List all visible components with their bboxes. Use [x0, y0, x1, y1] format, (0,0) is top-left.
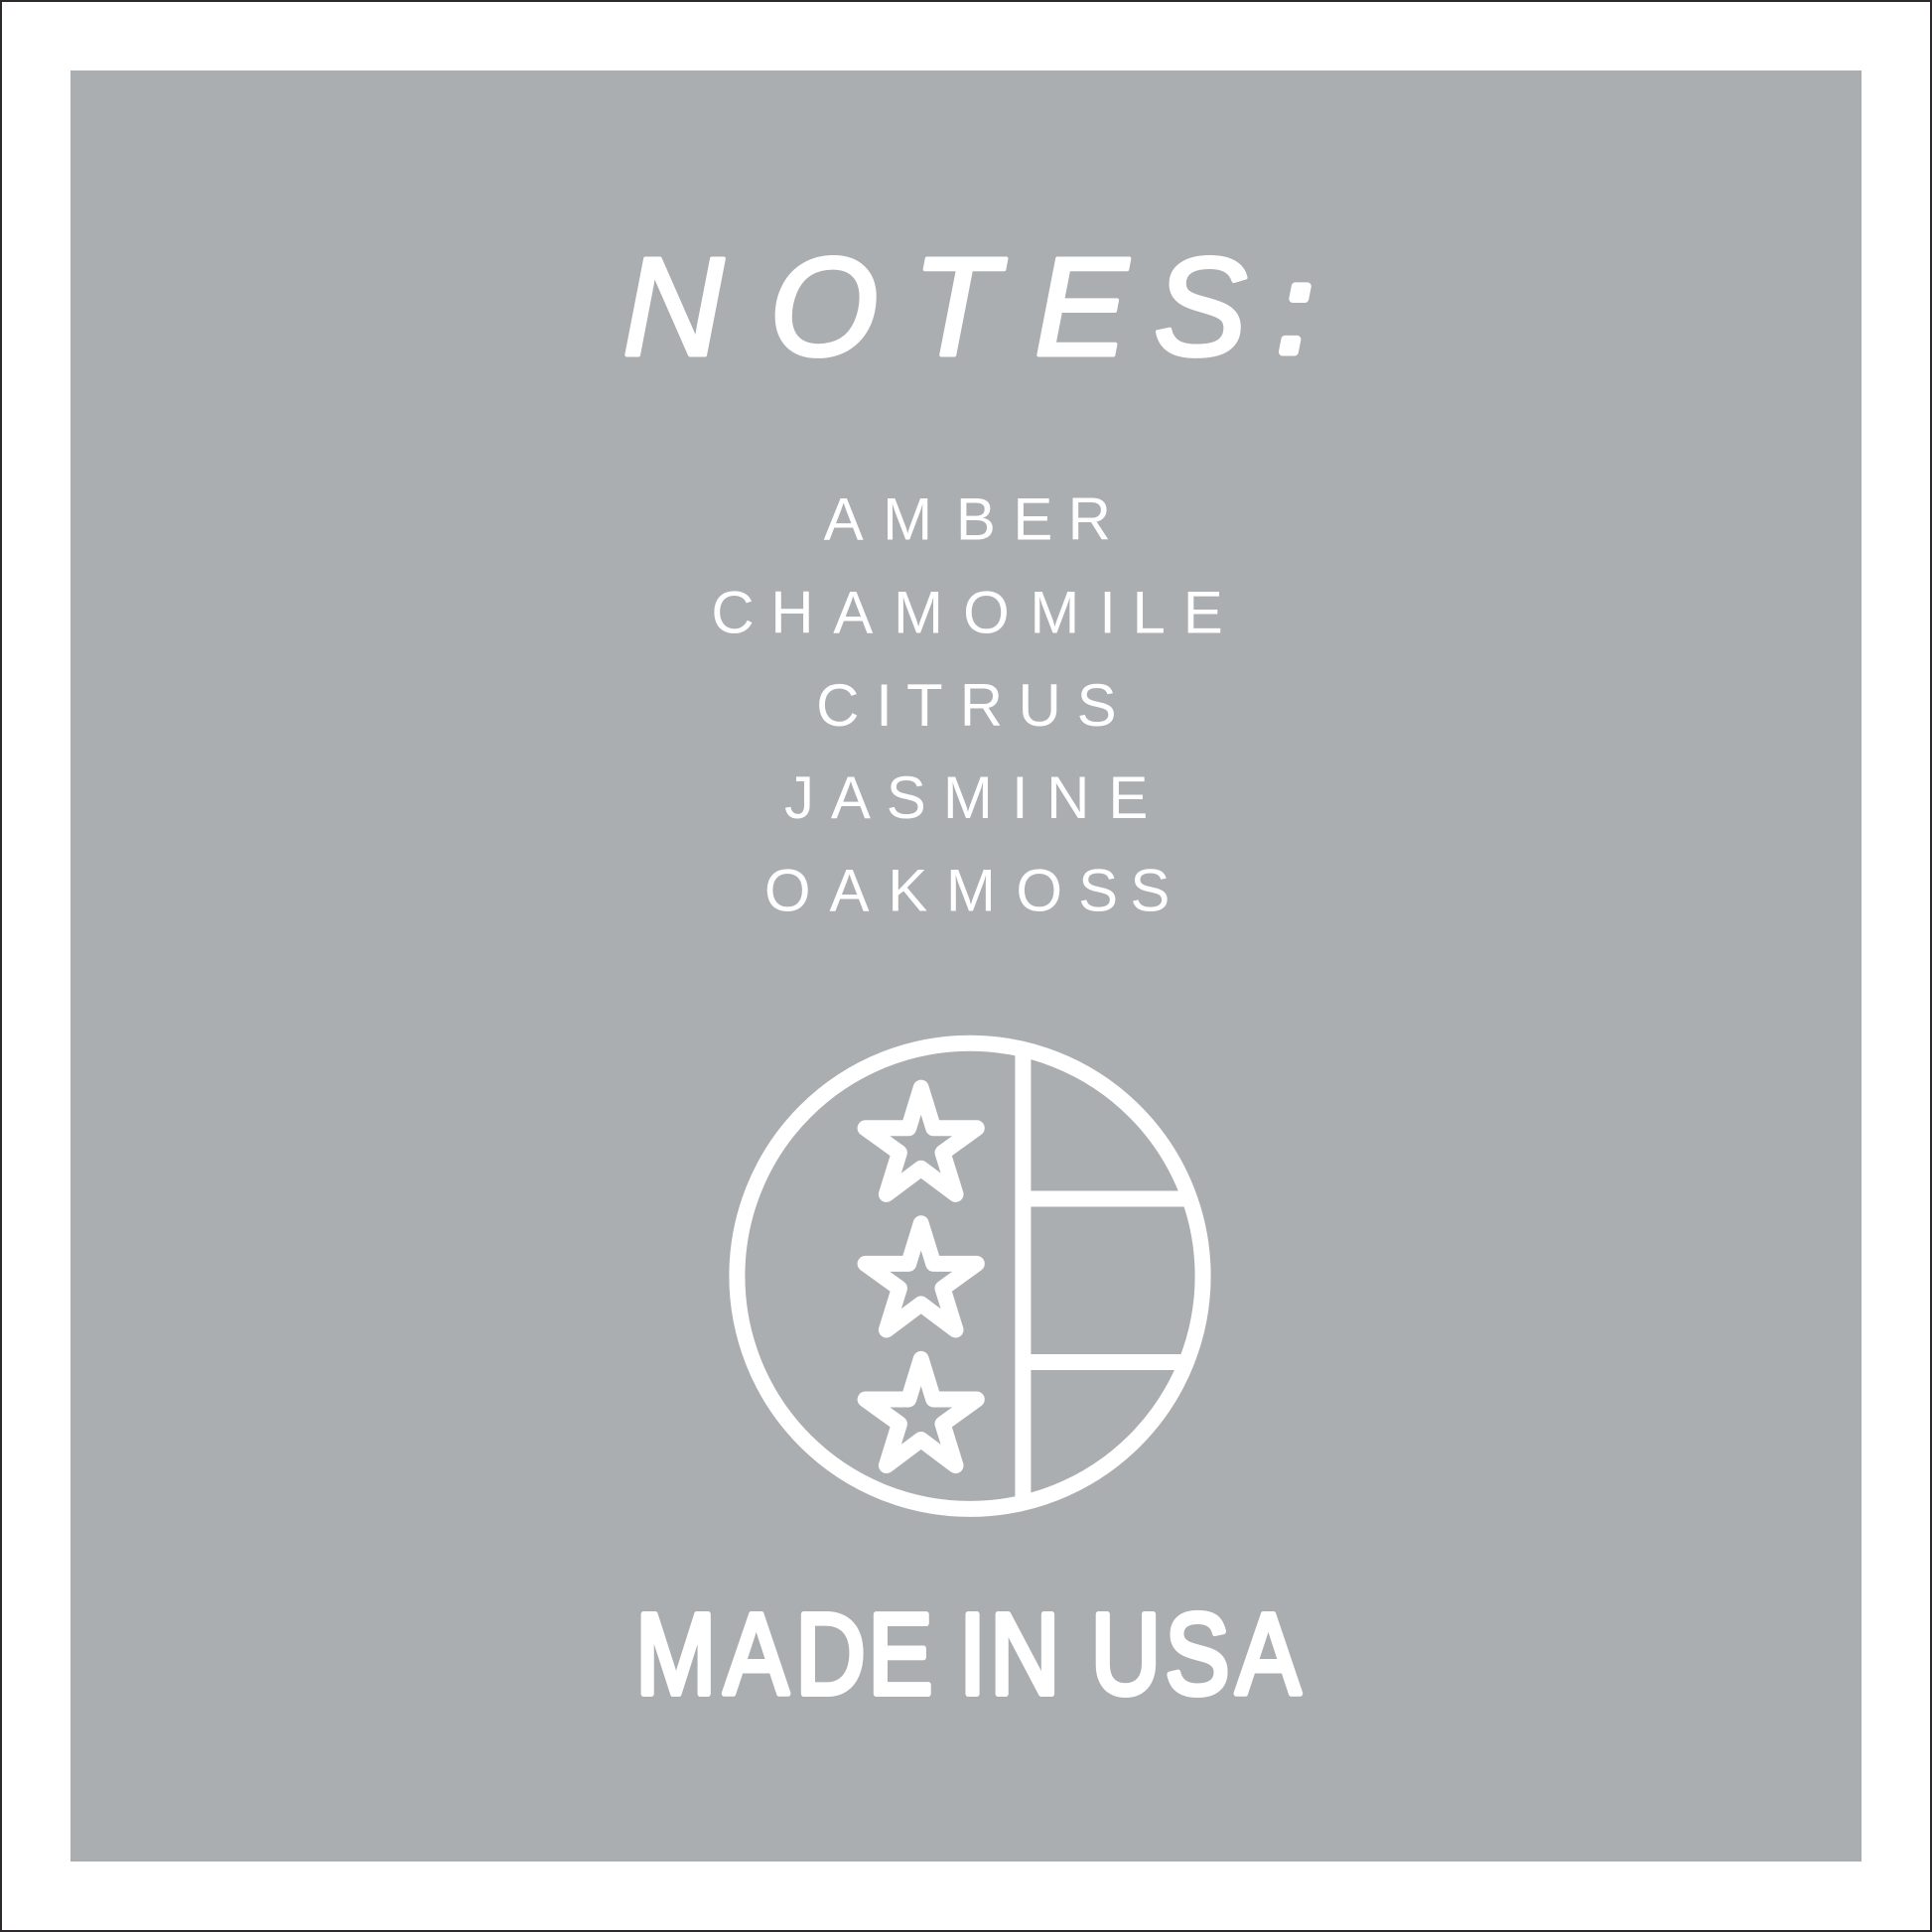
icon: vertical divider — [1015, 1049, 1031, 1503]
note: citrus: CITRUS — [816, 672, 1117, 739]
notes list — [711, 486, 1223, 923]
note: jasmine: JASMINE — [784, 764, 1148, 831]
note: oakmoss: OAKMOSS — [764, 858, 1170, 923]
icon: star 3 — [866, 1359, 977, 1465]
title: : — [1278, 240, 1312, 379]
icon: star 1 — [866, 1088, 977, 1194]
icon: outer circle — [737, 1043, 1203, 1509]
icon: upper stripe line — [1023, 1191, 1189, 1207]
icon: circle flag with three stars — [737, 1043, 1203, 1509]
icon: star 2 — [866, 1223, 977, 1330]
title: NOTES — [622, 228, 1247, 385]
note: chamomile: CHAMOMILE — [711, 580, 1223, 645]
note: amber: AMBER — [824, 486, 1111, 552]
made in usa label: MADE IN USA — [635, 1589, 1301, 1719]
icon: lower stripe line — [1023, 1354, 1186, 1370]
